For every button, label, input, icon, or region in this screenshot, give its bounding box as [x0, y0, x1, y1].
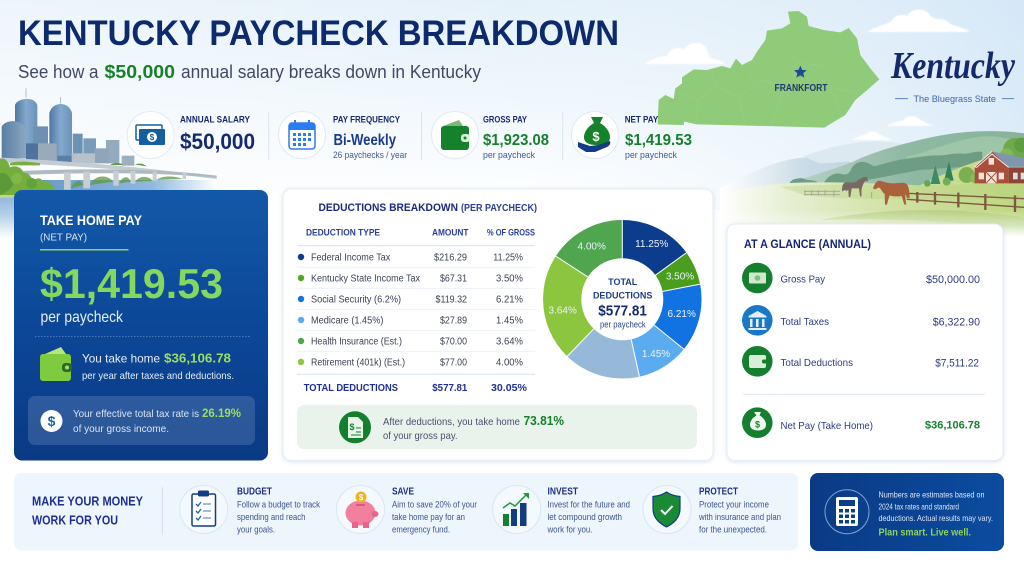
deductions table: 3.50%: [496, 273, 523, 284]
stat: net pay: $1,419.53: [625, 132, 692, 149]
tip: save: [336, 486, 477, 534]
callout: effective tax rate: [28, 396, 255, 445]
deductions table: Medicare (1.45%): [311, 315, 384, 326]
panel: disclaimer: deductions. Actual results may vary.: [878, 513, 993, 523]
callout: effective tax rate: 26.19%: [202, 406, 241, 420]
panel: disclaimer: Numbers are estimates based on: [878, 490, 985, 500]
deductions table: 1.45%: [496, 315, 523, 326]
tip: save: Aim to save 20% of your: [392, 500, 477, 510]
donut chart: 3.50%: [666, 272, 694, 282]
donut chart: 3.64%: [549, 306, 577, 316]
donut chart: 6.21%: [668, 309, 696, 320]
deductions table: Federal Income Tax: [311, 252, 390, 263]
tip: save: $: [359, 493, 364, 502]
horses: [842, 177, 910, 205]
Kentucky script logo: [890, 45, 1015, 105]
tip: invest: work for you.: [547, 524, 592, 534]
stat: net pay: NET PAY: [625, 114, 658, 124]
callout: effective tax rate: $: [48, 413, 56, 429]
fence: [804, 190, 1024, 212]
stat: annual salary: $50,000: [180, 129, 255, 154]
callout: take home share: After deductions, you take home: [383, 416, 520, 428]
tip: budget: spending and reach: [237, 512, 306, 522]
donut chart: TOTAL: [608, 277, 638, 287]
deductions table: $216.29: [434, 252, 467, 263]
row: total taxes: [742, 305, 980, 336]
tip: protect: Protect your income: [699, 500, 769, 510]
row: net pay: Net Pay (Take Home): [780, 420, 873, 432]
panel: disclaimer: [810, 473, 1004, 551]
map label: Frankfort: FRANKFORT: [774, 83, 828, 94]
deductions table: % OF GROSS: [487, 228, 535, 238]
tip: budget: [180, 486, 320, 534]
tip: invest: Invest for the future and: [548, 500, 630, 510]
row: total deductions: $7,511.22: [935, 358, 979, 370]
callout: take home share: of your gross pay.: [383, 430, 458, 442]
row: total deductions: Total Deductions: [780, 357, 853, 369]
donut chart: DEDUCTIONS: [593, 290, 652, 300]
deductions table: $70.00: [440, 336, 467, 347]
deductions table: Health Insurance (Est.): [311, 336, 402, 347]
row: total taxes: $6,322.90: [933, 316, 980, 328]
tip: save: take home pay for an: [392, 512, 465, 522]
tip: save: SAVE: [392, 486, 414, 497]
title: KENTUCKY PAYCHECK BREAKDOWN: [18, 14, 619, 53]
panel: take home pay: You take home: [82, 352, 160, 366]
donut chart: 11.25%: [635, 239, 668, 250]
deductions table: $577.81: [432, 383, 468, 394]
landscape: farm, hills, horses and fence: [720, 131, 1024, 237]
row: gross pay: Gross Pay: [780, 273, 826, 285]
deductions table: Social Security (6.2%): [311, 294, 401, 305]
donut chart: [549, 220, 700, 377]
row: total deductions: [742, 346, 979, 377]
row: net pay: $: [755, 420, 760, 430]
capital star: [794, 66, 807, 78]
callout: take home share: $: [349, 422, 355, 432]
deductions table: DEDUCTION TYPE: [306, 228, 380, 238]
heading: [318, 202, 537, 214]
deductions table: $77.00: [440, 357, 467, 368]
panel: take home pay: $1,419.53: [40, 260, 223, 307]
panel: deductions breakdown: [283, 189, 713, 460]
tip: protect: with insurance and plan: [698, 512, 781, 522]
panel: disclaimer: Plan smart. Live well.: [878, 527, 971, 539]
icon: cash: $: [150, 133, 155, 142]
panel: make your money work for you: WORK FOR YOU: [32, 514, 118, 528]
stat: gross pay: $1,923.08: [483, 132, 549, 149]
deductions table: Retirement (401k) (Est.): [311, 357, 405, 368]
row: gross pay: $50,000.00: [926, 274, 980, 286]
panel: make your money work for you: [14, 473, 798, 550]
icon: wallet: [441, 120, 470, 150]
tip: protect: for the unexpected.: [699, 524, 767, 534]
donut chart: $577.81: [598, 302, 647, 320]
subtitle: See how a: [18, 62, 99, 82]
subtitle: $50,000: [104, 62, 175, 82]
tip: protect: [643, 486, 781, 534]
subtitle: annual salary breaks down in Kentucky: [181, 62, 481, 82]
deductions table: $27.89: [440, 315, 467, 326]
donut chart: 4.00%: [578, 242, 606, 252]
stat: net pay: [572, 112, 692, 161]
skyline, bridge and river: [0, 88, 217, 238]
icon: lime wallet: [40, 347, 72, 381]
callout: take home share: 73.81%: [524, 413, 564, 428]
callout: effective tax rate: Your effective total tax rate is: [73, 408, 199, 420]
tip: budget: your goals.: [237, 524, 275, 534]
tip: budget: Follow a budget to track: [237, 500, 320, 510]
row: net pay: $36,106.78: [925, 420, 980, 432]
Kentucky script logo: The Bluegrass State: [914, 94, 996, 105]
panel: take home pay: per year after taxes and deductions.: [82, 370, 234, 382]
deductions table: 6.21%: [496, 294, 523, 305]
deductions table: 4.00%: [496, 357, 523, 368]
deductions table: Kentucky State Income Tax: [311, 273, 420, 284]
row: net pay: [742, 407, 980, 438]
deductions table: TOTAL DEDUCTIONS: [304, 383, 398, 394]
barn: [975, 151, 1024, 183]
deductions table: $67.31: [440, 273, 467, 284]
heading: DEDUCTIONS BREAKDOWN: [318, 202, 458, 214]
panel: take home pay: $36,106.78: [164, 351, 231, 366]
donut chart: per paycheck: [600, 320, 646, 330]
tip: protect: PROTECT: [699, 486, 738, 497]
callout: effective tax rate: of your gross income.: [73, 423, 169, 435]
panel: take home pay: (NET PAY): [40, 232, 87, 244]
subtitle: [18, 62, 481, 82]
deductions table: 11.25%: [493, 252, 523, 263]
deductions table: 30.05%: [491, 383, 527, 394]
icon: money bag in hand: $: [592, 129, 600, 144]
tip: invest: [493, 486, 630, 534]
heading: (PER PAYCHECK): [461, 203, 537, 214]
panel: disclaimer: 2024 tax rates and standard: [878, 501, 959, 511]
donut chart: 1.45%: [642, 349, 670, 360]
panel: take home pay: [14, 190, 268, 460]
tip: budget: BUDGET: [237, 486, 272, 497]
panel: take home pay: per paycheck: [40, 309, 124, 326]
deductions table: $119.32: [436, 294, 467, 305]
divider: [269, 112, 563, 160]
stat: pay frequency: PAY FREQUENCY: [333, 114, 400, 124]
deductions table: AMOUNT: [432, 228, 469, 238]
Kentucky state map: [658, 11, 879, 128]
stat: net pay: per paycheck: [625, 150, 677, 161]
stat: annual salary: ANNUAL SALARY: [180, 114, 250, 124]
tip: invest: INVEST: [548, 486, 578, 497]
callout: take home share: [297, 405, 697, 449]
tip: invest: let compound growth: [548, 512, 622, 522]
panel: at a glance: AT A GLANCE (ANNUAL): [744, 239, 871, 251]
panel: take home pay: TAKE HOME PAY: [40, 212, 143, 228]
stat: pay frequency: 26 paychecks / year: [333, 150, 407, 161]
panel: make your money work for you: MAKE YOUR MONEY: [32, 495, 144, 509]
tip: save: emergency fund.: [392, 524, 450, 534]
stat: gross pay: GROSS PAY: [483, 114, 527, 124]
deductions table: 3.64%: [496, 336, 523, 347]
trees: [924, 138, 1024, 187]
stat: annual salary: [127, 112, 255, 158]
panel: at a glance: [727, 224, 1003, 460]
clouds: [645, 9, 970, 140]
row: total taxes: Total Taxes: [780, 316, 829, 328]
deductions table: [297, 228, 535, 394]
icon: calculator: [836, 497, 858, 526]
icon: calendar: [289, 120, 315, 149]
row: gross pay: [742, 263, 980, 293]
stat: pay frequency: Bi-Weekly: [334, 132, 396, 149]
stat: gross pay: [432, 112, 549, 161]
stat: gross pay: per paycheck: [483, 150, 535, 161]
stat: pay frequency: [278, 112, 407, 161]
